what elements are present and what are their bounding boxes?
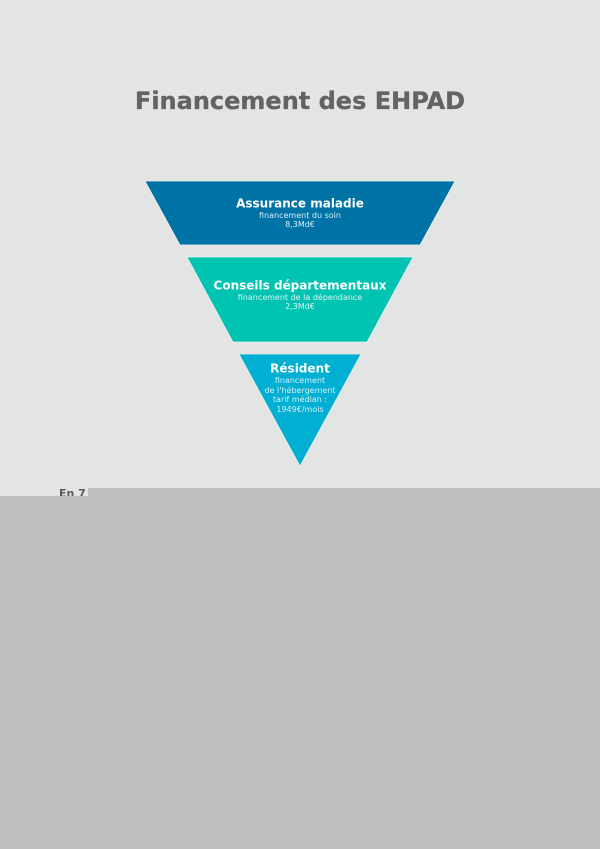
funnel tier: Assurance maladie: Assurance maladie (236, 196, 364, 210)
title: Financement des EHPAD (135, 87, 465, 115)
funnel tier: Résident: 1949€/mois (276, 405, 324, 414)
partially hidden body text: En 7 (59, 487, 86, 500)
funnel tier: Résident: financement (275, 376, 325, 385)
funnel tier: Résident: Résident (270, 362, 330, 376)
funnel tier: Assurance maladie (145, 181, 455, 245)
grey cover panel (0, 488, 600, 849)
funnel tier: Assurance maladie: 8,3Md€ (285, 220, 315, 229)
funnel tier: Conseils départementaux: 2,3Md€ (285, 302, 315, 311)
funnel tier: Résident: de l'hébergement (264, 385, 336, 395)
funnel tier: Résident: tarif médian : (273, 394, 327, 404)
funnel tier: Résident (239, 354, 361, 466)
funnel tier: Conseils départementaux (187, 257, 413, 342)
funnel tier: Conseils départementaux: Conseils départementaux (214, 278, 387, 292)
funnel tier: Conseils départementaux: financement de la dépendance (238, 292, 362, 302)
funnel tier: Assurance maladie: financement du soin (259, 211, 341, 220)
